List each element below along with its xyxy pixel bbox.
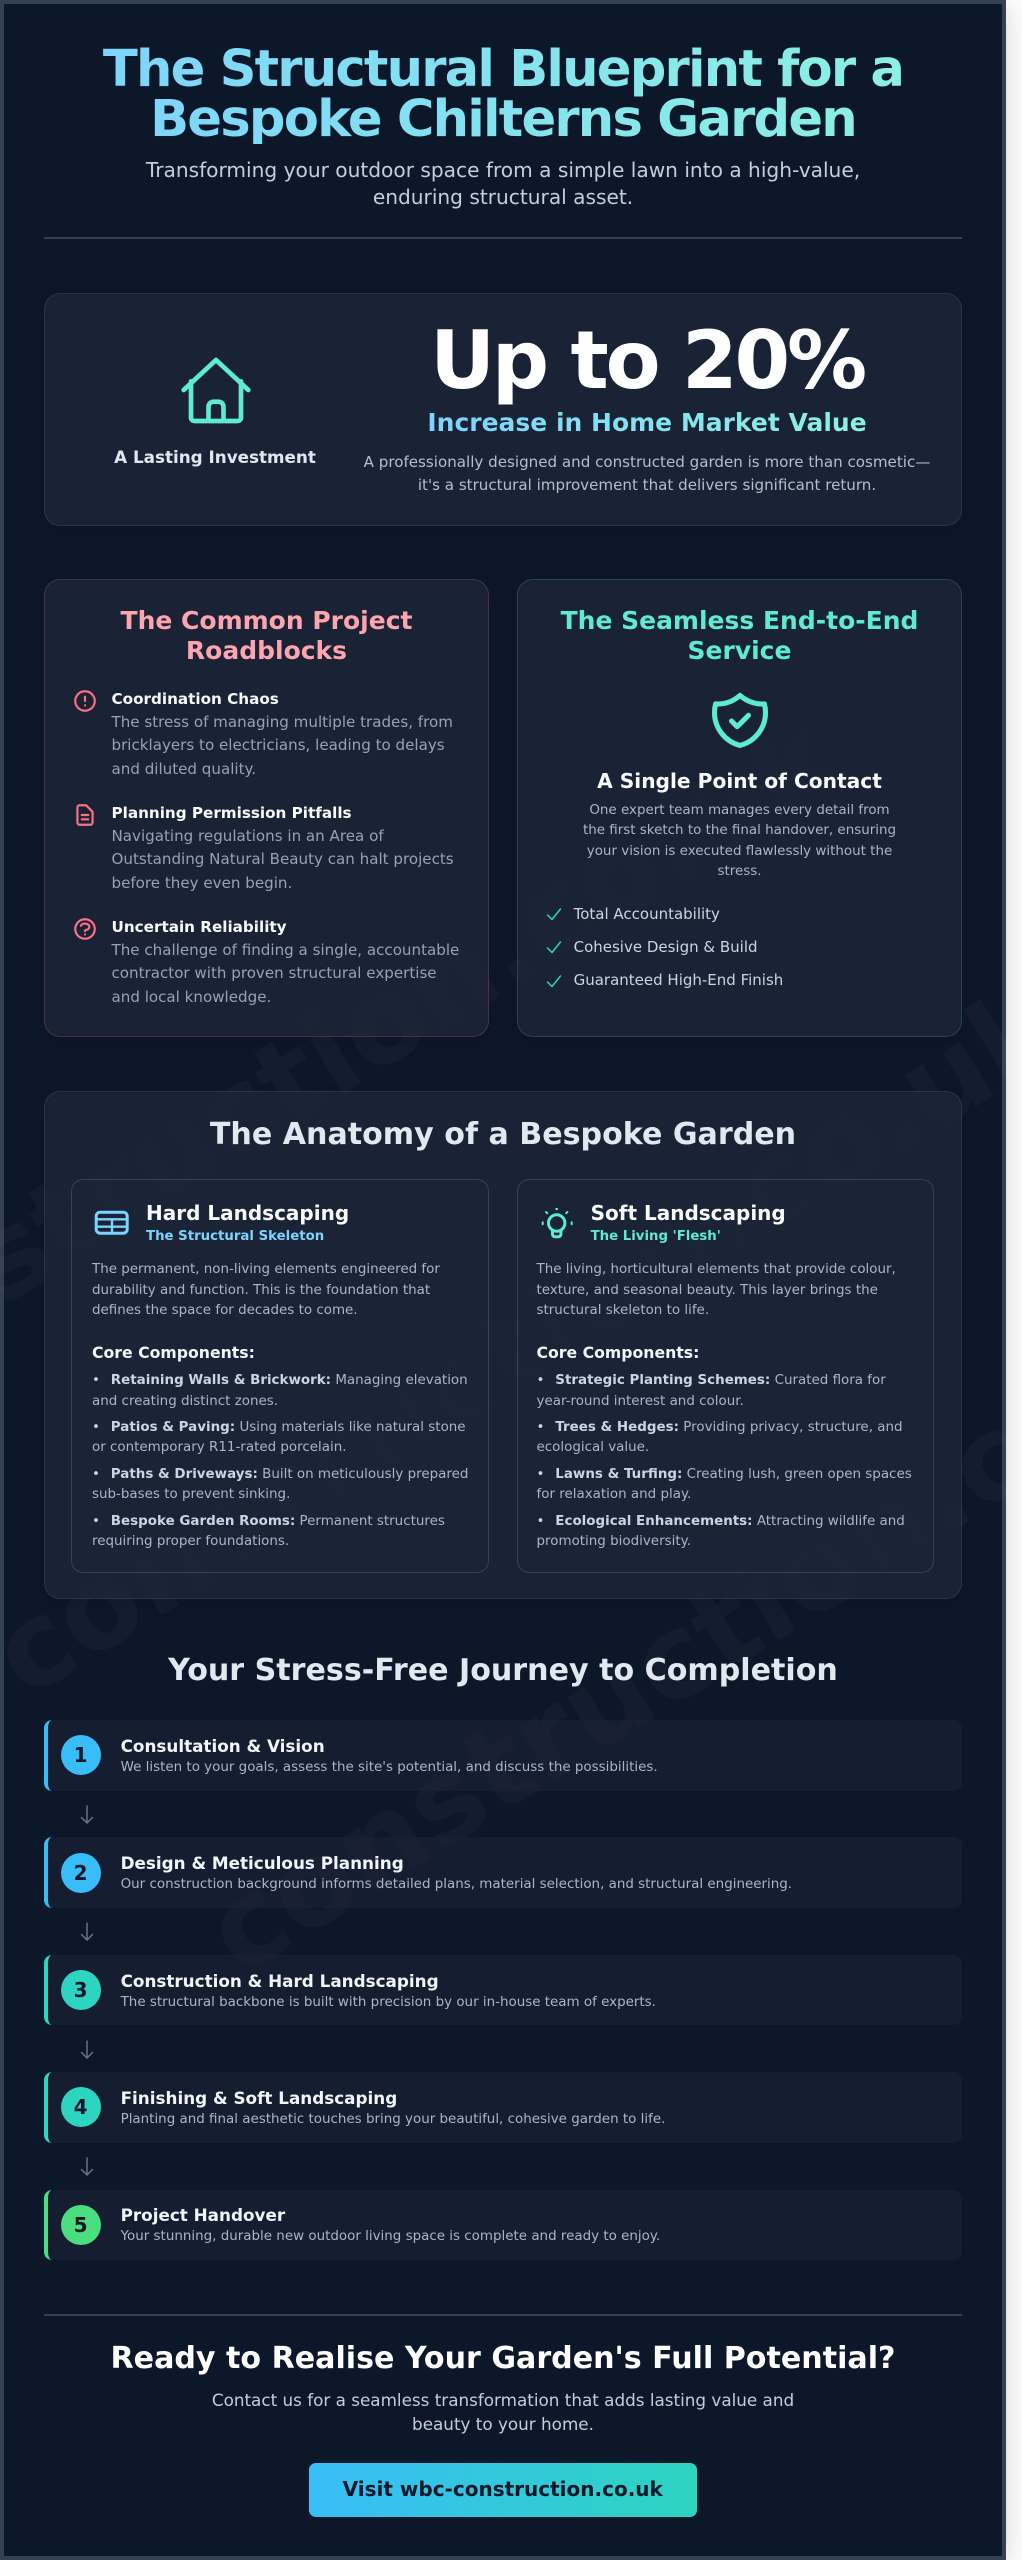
step 2 — [44, 1837, 962, 1908]
icon: document — [76, 804, 94, 826]
item text: The stress of managing multiple trades, from — [112, 713, 453, 731]
item text: contractor with proven structural expertise — [112, 964, 437, 982]
component 2: • — [92, 1420, 100, 1435]
step 5 — [44, 2190, 962, 2260]
component 2 — [92, 1420, 466, 1455]
stat label: Increase in Home Market Value — [427, 408, 867, 437]
component 3: • — [536, 1467, 544, 1482]
card title: Soft Landscaping — [591, 1201, 786, 1225]
component 3: sub-bases to prevent sinking. — [92, 1487, 290, 1502]
icon: house — [181, 358, 251, 424]
big stat: Up to 20% — [430, 314, 864, 407]
item text: before they even begin. — [112, 874, 292, 892]
step text: The structural backbone is built with precision by our in-house team of experts. — [121, 1995, 656, 2010]
item text — [111, 941, 459, 1006]
icon caption: A Lasting Investment — [114, 447, 316, 467]
component 4: promoting biodiversity. — [536, 1534, 691, 1549]
call to action text — [212, 2390, 794, 2434]
component 4: • — [92, 1514, 100, 1529]
heading: The Common Project — [121, 606, 412, 635]
component 3: Lawns & Turfing: Creating lush, green open spaces — [555, 1467, 912, 1482]
step number: 1 — [74, 1743, 88, 1767]
card: hard landscaping — [71, 1179, 489, 1573]
step title: Finishing & Soft Landscaping — [121, 2088, 397, 2108]
component 1: and creating distinct zones. — [92, 1394, 278, 1409]
call to action text: Contact us for a seamless transformation that adds lasting value and — [212, 2390, 794, 2410]
icon: question circle — [74, 918, 96, 940]
component 4: Ecological Enhancements: Attracting wildlife and — [555, 1514, 905, 1529]
call to action text: beauty to your home. — [412, 2414, 594, 2434]
step title: Construction & Hard Landscaping — [121, 1971, 439, 1991]
item text: Navigating regulations in an Area of — [112, 827, 384, 845]
component 1: Retaining Walls & Brickwork: Managing elevation — [111, 1373, 468, 1388]
heading — [120, 606, 412, 665]
step title: Design & Meticulous Planning — [121, 1853, 404, 1873]
step number — [61, 2087, 101, 2127]
icon: light bulb — [542, 1208, 573, 1238]
item title: Coordination Chaos — [112, 690, 279, 708]
arrow — [80, 2040, 94, 2059]
item: planning permission pitfalls — [76, 804, 454, 892]
item text — [111, 713, 453, 778]
check 2 — [546, 941, 562, 954]
card description: durability and function. This is the foundation that — [92, 1283, 430, 1298]
component 4: • — [536, 1514, 544, 1529]
card subtitle: The Structural Skeleton — [146, 1229, 324, 1244]
card: soft landscaping — [517, 1179, 934, 1573]
description: the first sketch to the final handover, ensuring — [583, 823, 896, 838]
component 1: • — [536, 1373, 544, 1388]
step number: 3 — [74, 1978, 88, 2002]
journey heading: Your Stress-Free Journey to Completion — [168, 1653, 838, 1688]
component 2: Patios & Paving: Using materials like natural stone — [111, 1420, 466, 1435]
subtitle — [146, 158, 860, 209]
icon: shield check — [712, 692, 768, 748]
component 3: for relaxation and play. — [536, 1487, 691, 1502]
component 3: Paths & Driveways: Built on meticulously prepared — [111, 1467, 468, 1482]
step text: Our construction background informs detailed plans, material selection, and structural engineering. — [121, 1877, 792, 1892]
step number — [61, 1853, 101, 1893]
component 4: requiring proper foundations. — [92, 1534, 289, 1549]
subtitle: enduring structural asset. — [373, 185, 633, 209]
item: coordination chaos — [74, 690, 453, 778]
subheading: A Single Point of Contact — [597, 769, 882, 793]
description — [583, 803, 896, 879]
step 3 — [44, 1955, 962, 2025]
components heading: Core Components: — [536, 1343, 699, 1362]
component 1: year-round interest and colour. — [536, 1394, 744, 1409]
card description: texture, and seasonal beauty. This layer brings the — [536, 1283, 878, 1298]
component 4 — [92, 1514, 445, 1549]
heading: Roadblocks — [186, 636, 347, 665]
item text: bricklayers to electricians, leading to delays — [112, 736, 445, 754]
step number: 4 — [74, 2095, 88, 2119]
item: uncertain reliability — [74, 918, 459, 1006]
step 1 — [44, 1720, 962, 1791]
arrow — [80, 2157, 94, 2176]
panel: seamless end-to-end service — [517, 579, 962, 1037]
item title: Planning Permission Pitfalls — [112, 804, 352, 822]
component 1: Strategic Planting Schemes: Curated flora for — [555, 1373, 886, 1388]
card description: The permanent, non-living elements engineered for — [92, 1262, 440, 1277]
benefit 1: Total Accountability — [574, 905, 720, 923]
check 3 — [546, 975, 562, 988]
card description — [92, 1262, 440, 1318]
arrow — [80, 1805, 94, 1824]
item text: The challenge of finding a single, accountable — [112, 941, 459, 959]
card subtitle: The Living 'Flesh' — [591, 1229, 721, 1244]
icon: paving grid — [94, 1210, 129, 1235]
item text — [112, 827, 454, 892]
benefit 2: Cohesive Design & Build — [574, 938, 758, 956]
card title: Hard Landscaping — [146, 1201, 349, 1225]
component 3 — [536, 1467, 912, 1502]
title: Bespoke Chilterns Garden — [150, 89, 856, 149]
panel: common project roadblocks — [44, 579, 489, 1037]
benefits checklist — [546, 905, 783, 989]
item title: Uncertain Reliability — [112, 918, 287, 936]
step number — [61, 1735, 101, 1775]
stat description: A professionally designed and constructed garden is more than cosmetic— — [364, 453, 930, 471]
panel: lasting investment — [44, 293, 962, 526]
title — [44, 44, 962, 144]
heading: The Seamless End-to-End — [561, 606, 918, 635]
heading: The Anatomy of a Bespoke Garden — [210, 1117, 796, 1152]
component 1: • — [92, 1373, 100, 1388]
item text: and local knowledge. — [112, 988, 271, 1006]
step text: We listen to your goals, assess the site's potential, and discuss the possibilities. — [121, 1760, 658, 1775]
card description: structural skeleton to life. — [536, 1303, 709, 1318]
components heading: Core Components: — [92, 1343, 255, 1362]
step title: Project Handover — [121, 2205, 285, 2225]
stat description: it's a structural improvement that delivers significant return. — [418, 476, 876, 494]
description: your vision is executed flawlessly without the — [587, 844, 892, 859]
step number — [61, 1970, 101, 2010]
panel: anatomy of a bespoke garden — [44, 1091, 962, 1599]
step number — [61, 2205, 101, 2245]
title: The Structural Blueprint for a — [103, 39, 903, 99]
stat description — [364, 453, 930, 494]
check 1 — [546, 908, 562, 920]
item text: and diluted quality. — [112, 760, 256, 778]
component 2 — [536, 1420, 903, 1455]
step 4 — [44, 2072, 962, 2143]
description: stress. — [717, 864, 762, 879]
component 2: • — [536, 1420, 544, 1435]
icon: alert circle — [74, 690, 96, 712]
call to action button: Visit wbc-construction.co.uk — [343, 2477, 663, 2501]
item text: Outstanding Natural Beauty can halt projects — [112, 850, 454, 868]
component 2: Trees & Hedges: Providing privacy, structure, and — [555, 1420, 903, 1435]
component 2: or contemporary R11-rated porcelain. — [92, 1440, 347, 1455]
step text: Planting and final aesthetic touches bring your beautiful, cohesive garden to life. — [121, 2112, 665, 2127]
benefit 3: Guaranteed High-End Finish — [574, 971, 783, 989]
heading: Service — [688, 636, 791, 665]
component 1 — [536, 1373, 886, 1409]
component 4 — [536, 1514, 905, 1549]
component 2: ecological value. — [536, 1440, 649, 1455]
description: One expert team manages every detail from — [589, 803, 890, 818]
card description: defines the space for decades to come. — [92, 1303, 358, 1318]
subtitle: Transforming your outdoor space from a simple lawn into a high-value, — [146, 158, 860, 182]
call to action button — [308, 2463, 697, 2517]
step number: 2 — [74, 1861, 88, 1885]
component 1 — [92, 1373, 468, 1409]
arrow — [80, 1922, 94, 1941]
heading — [560, 606, 918, 665]
component 4: Bespoke Garden Rooms: Permanent structures — [111, 1514, 445, 1529]
step title: Consultation & Vision — [121, 1736, 325, 1756]
call to action heading: Ready to Realise Your Garden's Full Potential? — [110, 2341, 895, 2376]
step text: Your stunning, durable new outdoor living space is complete and ready to enjoy. — [121, 2229, 660, 2244]
component 3 — [92, 1467, 468, 1502]
card description: The living, horticultural elements that provide colour, — [536, 1262, 896, 1277]
card description — [536, 1262, 896, 1318]
component 3: • — [92, 1467, 100, 1482]
step number: 5 — [74, 2213, 88, 2237]
